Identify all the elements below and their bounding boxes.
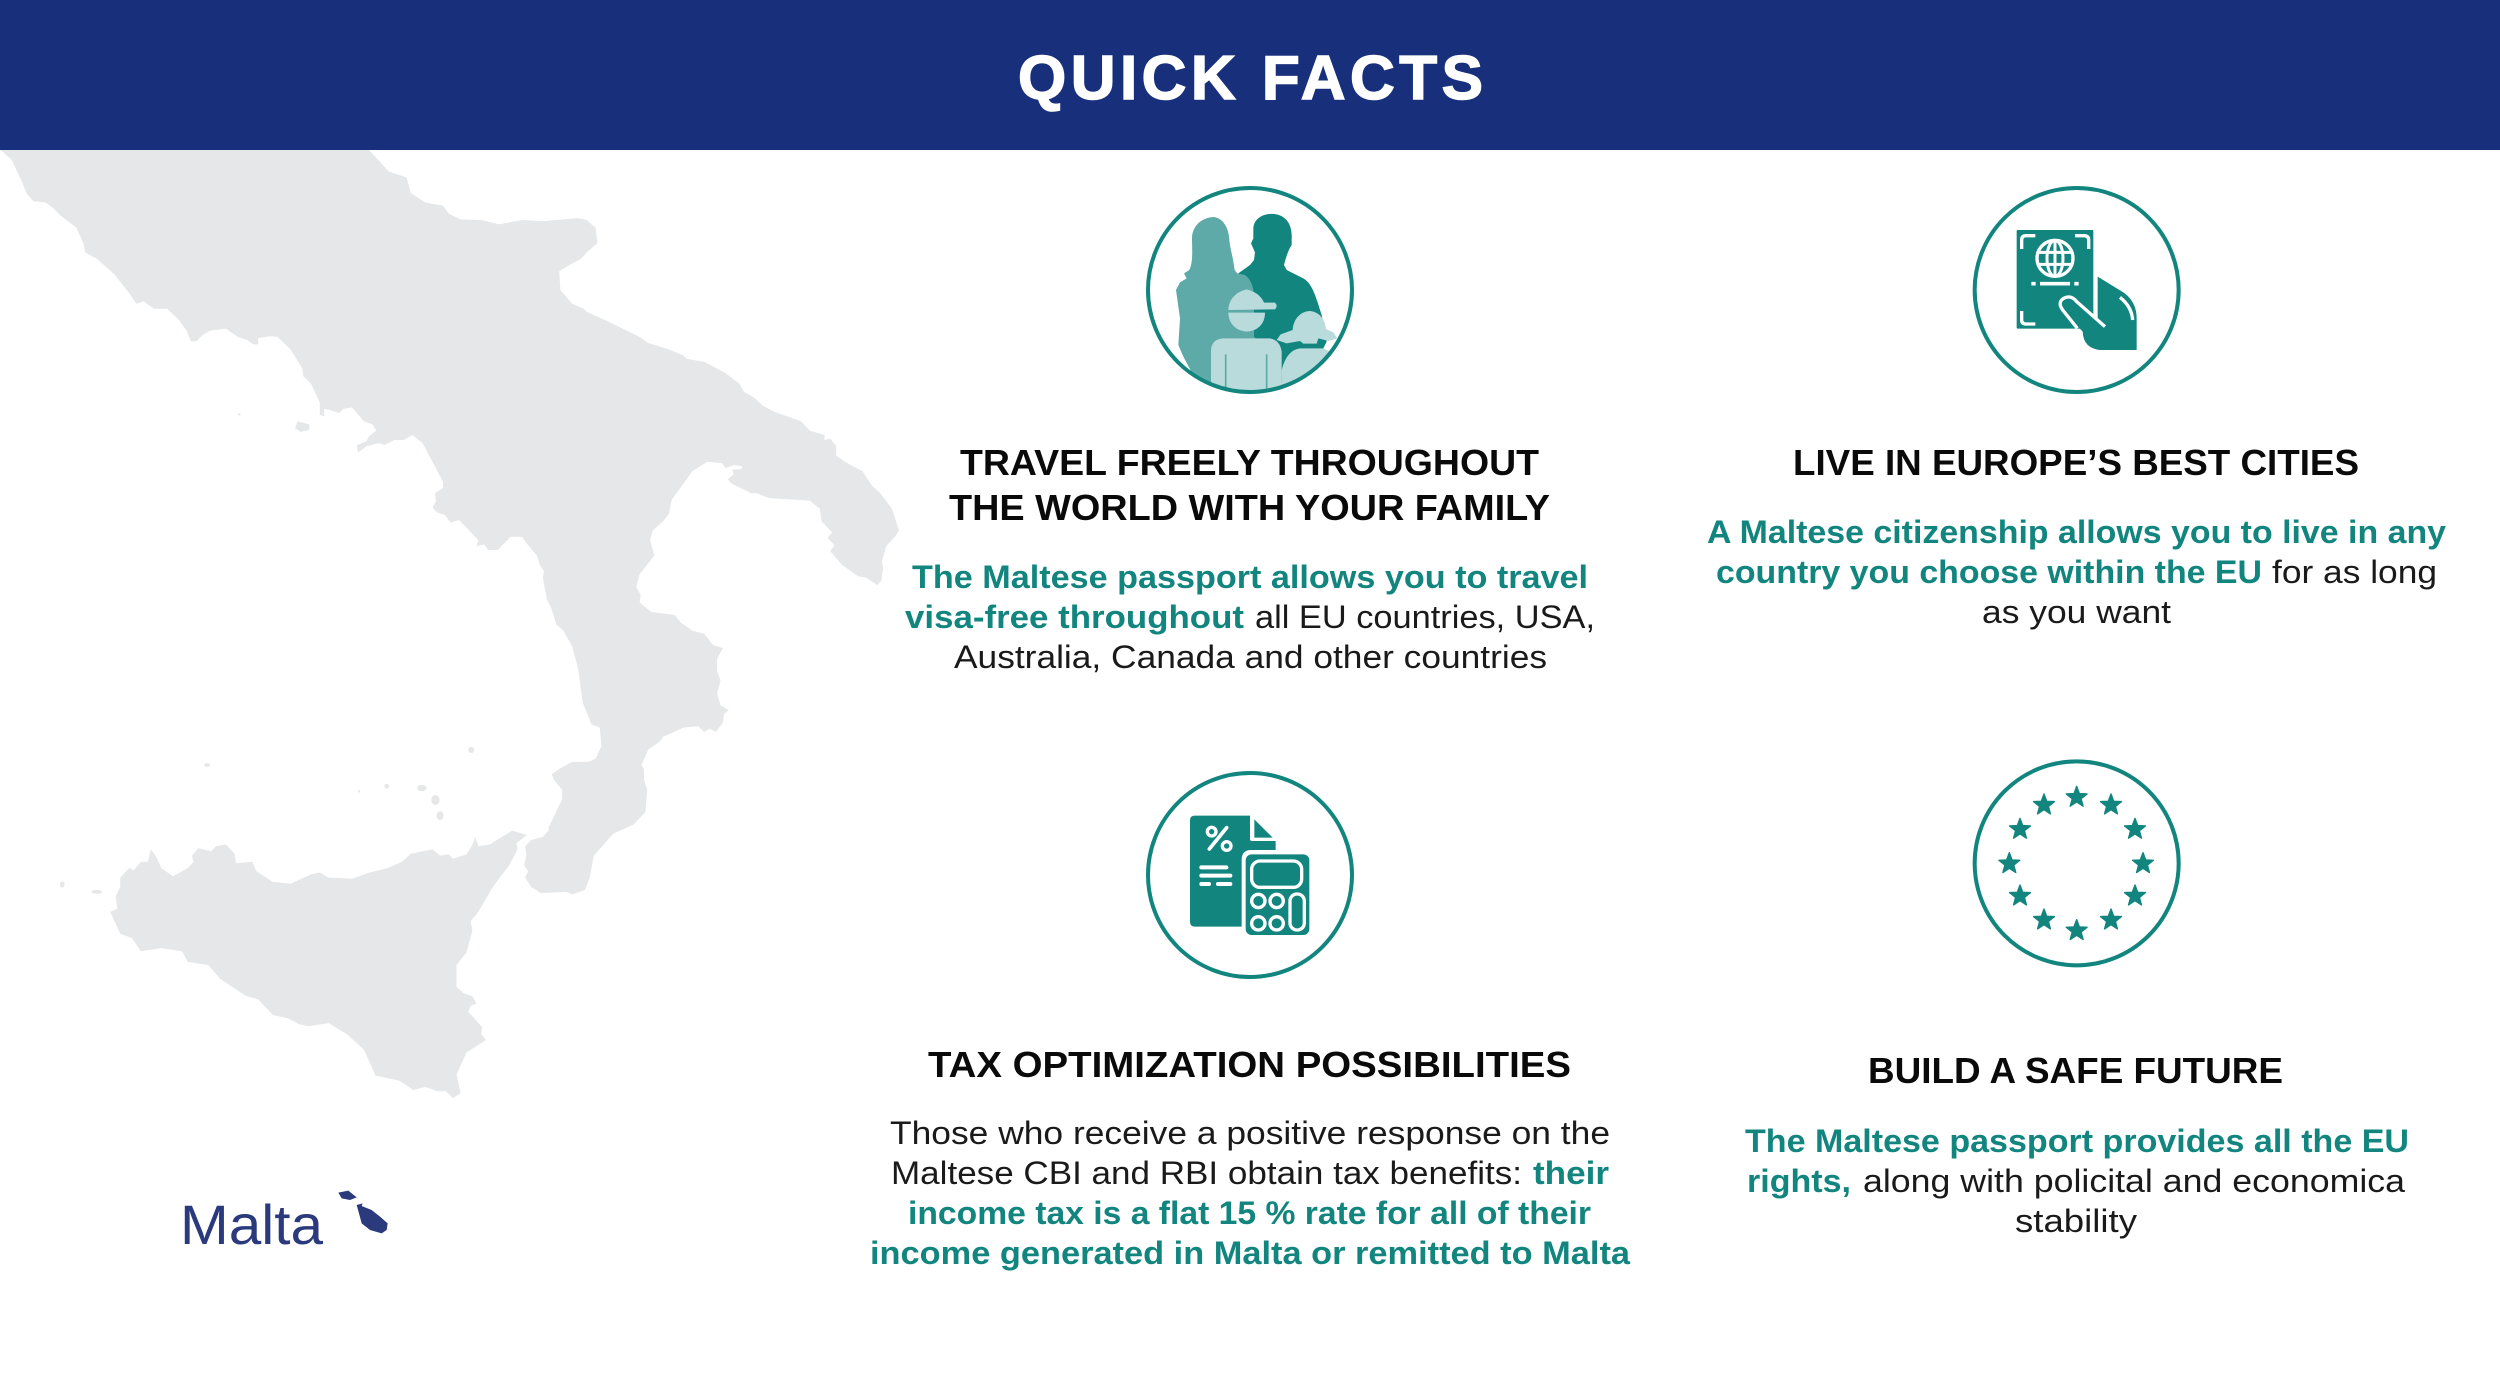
map: southern Italy and Sicily [0,149,899,1098]
heading: TAX OPTIMIZATION POSSIBILITIES [928,1044,1571,1085]
heading: THE WORLD WITH YOUR FAMILY [949,487,1550,528]
body text: their [1533,1155,1609,1191]
body text [1745,1123,2409,1239]
body text: along with policital and economica [1863,1163,2405,1199]
body text: A Maltese citizenship allows you to live in any [1707,514,2446,550]
body text: visa-free throughout [905,599,1244,635]
body text: country you choose within the EU [1716,554,2262,590]
title: QUICK FACTS [1018,44,1483,113]
icon: passport and hand [1975,188,2179,392]
body text [905,559,1595,675]
icon: EU stars [1975,761,2179,965]
body text: stability [2015,1203,2137,1239]
body text: income generated in Malta or remitted to Malta [870,1235,1630,1271]
body text: all EU countries, USA, [1255,599,1595,635]
panel: build a safe future [1745,761,2409,1239]
header bar [0,0,2500,150]
icon: tax document and calculator [1148,773,1352,977]
body text: Those who receive a positive response on the [890,1115,1610,1151]
malta label with island icon [180,1191,388,1256]
icon: Malta islands [338,1191,388,1233]
heading: TRAVEL FREELY THROUGHOUT [960,442,1539,483]
body text: The Maltese passport allows you to travel [912,559,1588,595]
heading: LIVE IN EUROPE’S BEST CITIES [1793,442,2359,483]
body text: The Maltese passport provides all the EU [1745,1123,2409,1159]
body text [870,1115,1630,1271]
icon: family [1148,188,1352,395]
body text [1707,514,2446,630]
panel: live in Europe [1707,188,2446,630]
panel: tax optimization [870,773,1630,1271]
body text: Maltese CBI and RBI obtain tax benefits: [891,1155,1522,1191]
body text: income tax is a flat 15 % rate for all of their [908,1195,1591,1231]
body text: for as long [2272,554,2437,590]
label: Malta: Malta [180,1193,324,1256]
body text: as you want [1982,594,2171,630]
body text: Australia, Canada and other countries [954,639,1547,675]
body text: rights, [1747,1163,1851,1199]
heading [949,442,1550,528]
panel: travel freely [905,188,1595,675]
heading: BUILD A SAFE FUTURE [1868,1050,2283,1091]
